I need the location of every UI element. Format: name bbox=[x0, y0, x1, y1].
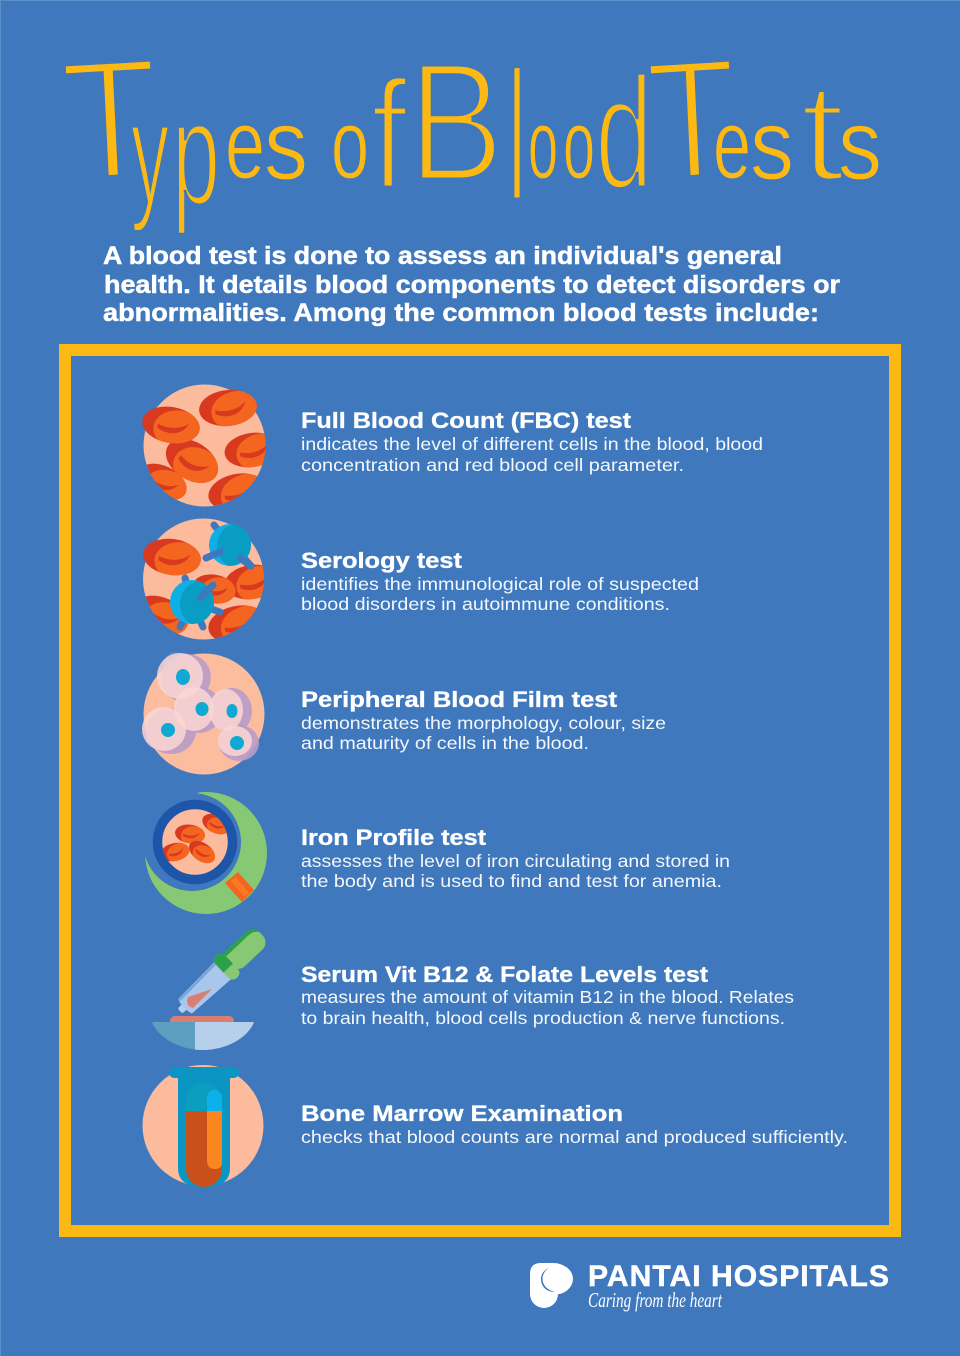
intro text: abnormalities. Among the common blood tests include: bbox=[103, 299, 819, 327]
description: Iron Profile: assesses the level of iron circulating and stored in bbox=[301, 851, 730, 871]
description: Serum Vit B12 and Folate bbox=[301, 987, 794, 1028]
description: Peripheral Blood Film: and maturity of cells in the blood. bbox=[301, 733, 589, 753]
heading: Serum Vit B12 and Folate: Serum Vit B12 & Folate Levels test bbox=[301, 962, 709, 987]
title: e bbox=[225, 89, 265, 199]
icon: blood film cells bbox=[142, 646, 264, 774]
title: e bbox=[713, 89, 751, 199]
heading: Full Blood Count: Full Blood Count (FBC) test bbox=[301, 408, 632, 433]
title: d bbox=[595, 43, 653, 222]
description: Iron Profile bbox=[301, 851, 730, 891]
icon: dropper and dish bbox=[152, 929, 266, 1050]
intro text: health. It details blood components to detect disorders or bbox=[104, 271, 840, 299]
description: Peripheral Blood Film bbox=[301, 713, 666, 753]
logo mark bbox=[530, 1263, 573, 1308]
title: o bbox=[331, 89, 369, 199]
title: o bbox=[563, 89, 595, 199]
title: f bbox=[371, 48, 408, 221]
title: o bbox=[528, 89, 558, 199]
icon: test tube bbox=[142, 1065, 264, 1187]
title: l bbox=[510, 36, 524, 237]
title: s bbox=[264, 89, 308, 201]
description: Serology bbox=[301, 574, 699, 614]
title: T bbox=[57, 23, 164, 217]
intro text: A blood test is done to assess an individual's general bbox=[103, 242, 782, 270]
heading: Peripheral Blood Film: Peripheral Blood Film test bbox=[301, 687, 618, 712]
title: s bbox=[750, 89, 794, 201]
heading: Serology: Serology test bbox=[301, 548, 463, 573]
title: T bbox=[642, 23, 742, 217]
description: Serology: identifies the immunological role of suspected bbox=[301, 574, 699, 594]
description: Full Blood Count: concentration and red blood cell parameter. bbox=[301, 455, 684, 475]
icon: red blood cells bbox=[142, 384, 266, 506]
heading: Iron Profile: Iron Profile test bbox=[301, 825, 487, 850]
title: t bbox=[800, 53, 845, 210]
icon: antibodies and blood cells bbox=[143, 518, 264, 640]
title: s bbox=[838, 89, 882, 201]
icon: magnifying glass bbox=[145, 792, 267, 914]
heading: Bone Marrow: Bone Marrow Examination bbox=[301, 1101, 623, 1126]
description: Full Blood Count bbox=[301, 434, 763, 475]
description: Serum Vit B12 and Folate: to brain health, blood cells production & nerve functions. bbox=[301, 1008, 785, 1028]
description: Iron Profile: the body and is used to find and test for anemia. bbox=[301, 871, 722, 891]
description: Peripheral Blood Film: demonstrates the morphology, colour, size bbox=[301, 713, 666, 733]
logo: Pantai Hospitals bbox=[530, 1260, 890, 1312]
title: p bbox=[172, 71, 220, 236]
description: Bone Marrow: checks that blood counts are normal and produced sufficiently. bbox=[301, 1127, 848, 1147]
description: Serology: blood disorders in autoimmune conditions. bbox=[301, 594, 670, 614]
logo tagline: Caring from the heart bbox=[588, 1288, 723, 1312]
logo name: PANTAI HOSPITALS bbox=[588, 1260, 890, 1293]
title: y bbox=[131, 72, 169, 233]
description: Serum Vit B12 and Folate: measures the amount of vitamin B12 in the blood. Relates bbox=[301, 987, 794, 1007]
intro text bbox=[103, 242, 840, 327]
title: B bbox=[408, 28, 504, 218]
panel: blood tests list frame bbox=[65, 350, 895, 1231]
description: Full Blood Count: indicates the level of different cells in the blood, blood bbox=[301, 434, 763, 454]
